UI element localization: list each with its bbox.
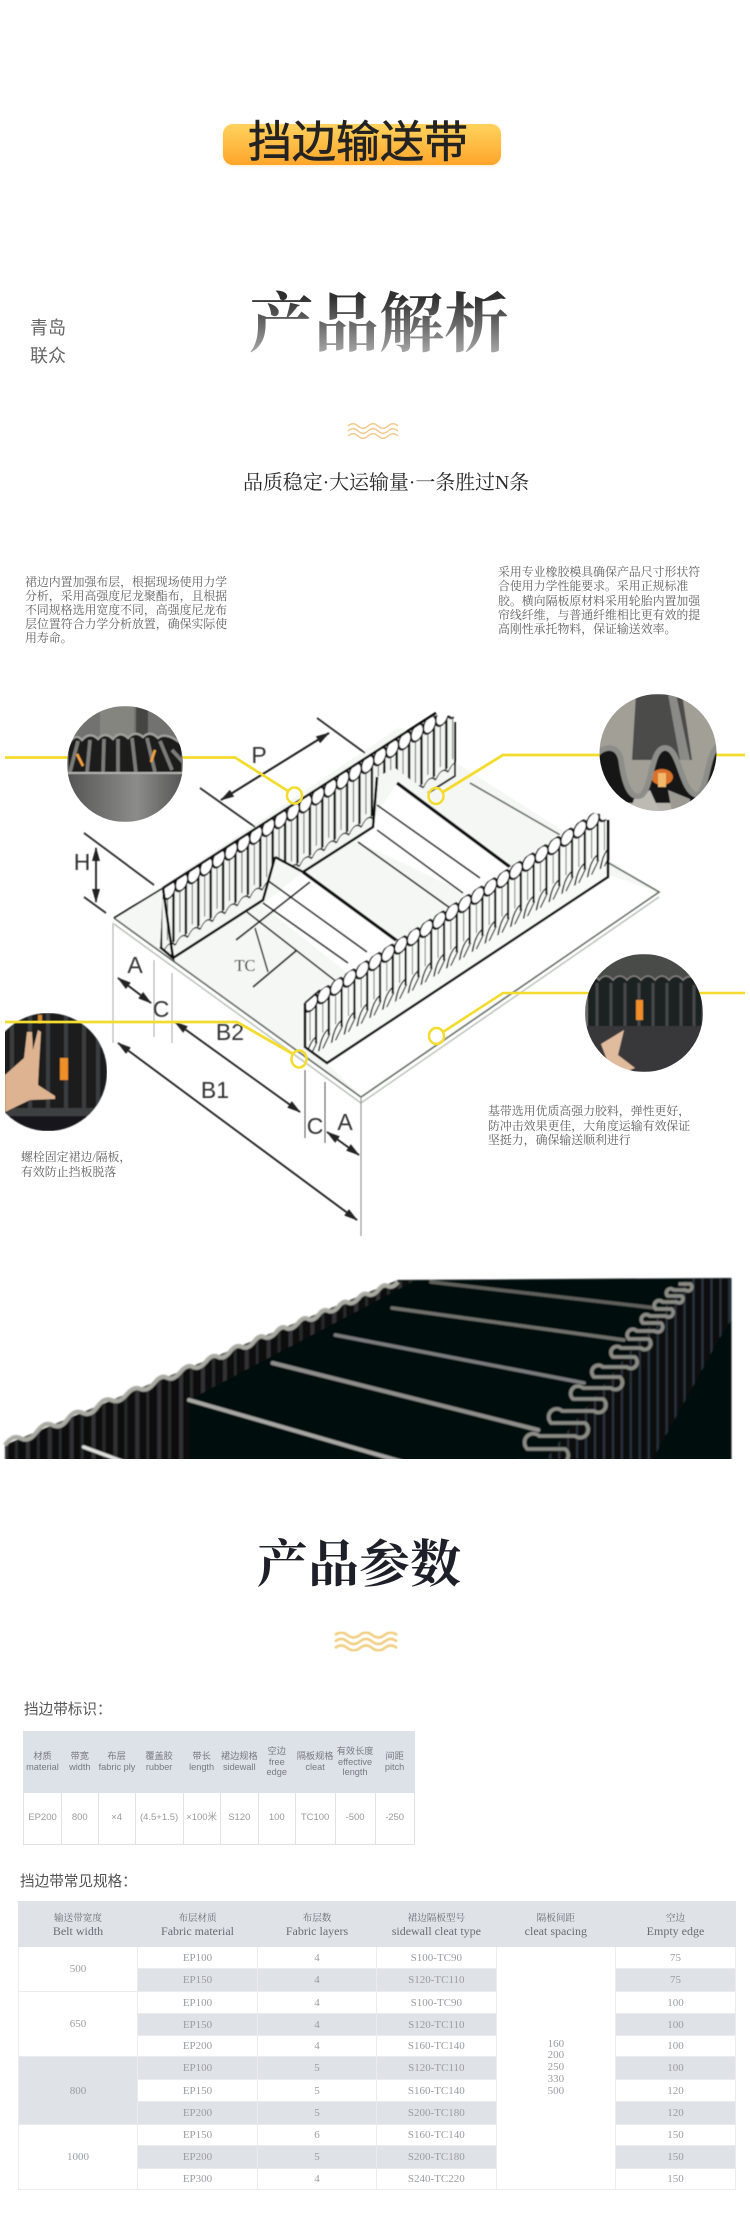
table: common specifications: 5 <box>314 2107 320 2119</box>
table: common specifications: 120 <box>667 2107 684 2119</box>
table: common specifications: EP150 <box>183 2018 212 2030</box>
technical diagram: sidewall belt <box>74 713 659 1236</box>
dimension labels: H <box>74 849 90 875</box>
left sidewall <box>5 1280 416 1470</box>
table: common specifications: 800 <box>70 2084 86 2096</box>
table: belt marking: 间距 <box>385 1751 404 1761</box>
table: common specifications: 100 <box>667 1996 684 2008</box>
table: common specifications: 1000 <box>67 2151 89 2163</box>
table: belt marking: 100 <box>269 1812 285 1823</box>
table: common specifications: 120 <box>667 2084 684 2096</box>
brand label: 青岛 <box>30 318 66 338</box>
table: belt marking: edge <box>267 1767 287 1777</box>
dimension labels <box>74 742 353 1139</box>
front sidewall <box>305 813 608 1063</box>
table: common specifications: 4 <box>314 2173 320 2185</box>
table: belt marking: EP200 <box>28 1812 57 1823</box>
table: belt marking: 裙边规格 <box>221 1751 258 1761</box>
product photo: sidewall belt <box>5 1278 731 1470</box>
table: common specifications: 5 <box>314 2084 320 2096</box>
callout line: lower right <box>429 993 745 1044</box>
table: common specifications: 75 <box>670 1952 681 1964</box>
text block: sidewall reinforcement: 不同规格选用宽度不同，高强度尼龙布 <box>25 603 227 617</box>
callout line: upper right <box>428 755 745 804</box>
dimension labels: A <box>337 1109 353 1135</box>
title banner <box>223 124 501 165</box>
table: belt marking: 带宽 <box>71 1751 89 1761</box>
text block: sidewall reinforcement: 用寿命。 <box>25 631 73 645</box>
text block: sidewall reinforcement <box>25 575 227 645</box>
belt base plate <box>114 727 659 1103</box>
table: belt marking: 带长 <box>192 1751 211 1761</box>
table: belt marking: 布层 <box>107 1751 126 1761</box>
table: common specifications: 330 <box>548 2073 564 2085</box>
text block: bolts <box>21 1150 131 1179</box>
belt floor <box>5 1278 731 1470</box>
dimension labels: C <box>307 1113 323 1139</box>
table: belt marking: length <box>343 1767 368 1777</box>
table: belt marking: free <box>269 1757 285 1767</box>
table: belt marking: 材质 <box>33 1751 52 1761</box>
text block: rubber moulds: 合使用力学性能要求。采用正规标准 <box>498 579 688 593</box>
photo circle: sidewall front view <box>67 706 183 822</box>
table: common specifications: S120-TC110 <box>408 1974 465 1986</box>
table: belt marking: pitch <box>385 1762 404 1772</box>
table: belt marking: 800 <box>72 1812 88 1823</box>
text block: base belt <box>488 1104 690 1147</box>
table: common specifications: EP100 <box>183 1996 212 2008</box>
table: common specifications: 160 <box>548 2038 564 2050</box>
table: common specifications: EP150 <box>183 1974 212 1986</box>
text block: base belt: 坚挺力，确保输送顺利进行 <box>488 1133 631 1147</box>
table: common specifications: 150 <box>667 2151 684 2163</box>
table: common specifications: Fabric material <box>161 1924 234 1938</box>
table: common specifications: cleat spacing <box>525 1924 587 1938</box>
dimension labels: TC <box>234 956 256 975</box>
dimension labels: P <box>251 742 267 768</box>
table: common specifications: 100 <box>667 2062 684 2074</box>
table: common specifications: S160-TC140 <box>408 2129 465 2141</box>
table: common specifications: 150 <box>667 2129 684 2141</box>
text block: rubber moulds: 帘线纤维，与普通纤维相比更有效的提 <box>498 608 700 622</box>
subtitle: 品质稳定·大运输量·一条胜过N条 <box>243 472 529 494</box>
right folded edge <box>515 1284 692 1464</box>
table: common specifications: EP200 <box>183 2151 212 2163</box>
dimension labels: B1 <box>201 1077 229 1103</box>
table: common specifications: EP300 <box>183 2173 212 2185</box>
table: common specifications: 200 <box>548 2049 564 2061</box>
table: belt marking: S120 <box>228 1812 250 1823</box>
heading: product parameters: 产品参数 <box>257 1538 461 1594</box>
table: belt marking: 空边 <box>268 1746 286 1756</box>
table: belt marking: rubber <box>146 1762 172 1772</box>
table: belt marking: 覆盖胶 <box>145 1751 173 1761</box>
icon: gold wave divider <box>335 1632 397 1650</box>
icon: orange wave divider <box>348 424 398 438</box>
table: common specifications: 150 <box>667 2173 684 2185</box>
table: common specifications: 4 <box>314 2018 320 2030</box>
table: common specifications: 空边 <box>666 1913 685 1924</box>
text block: bolts: 有效防止挡板脱落 <box>21 1165 116 1179</box>
table: common specifications: 布层材质 <box>178 1913 217 1924</box>
text block: rubber moulds: 胶。横向隔板原材料采用轮胎内置加强 <box>498 594 700 608</box>
table: common specifications: EP100 <box>183 1952 212 1964</box>
right sidewall <box>537 1279 731 1470</box>
text block: sidewall reinforcement: 分析，采用高强度尼龙聚酯布，且根据 <box>25 589 227 603</box>
table: common specifications: S120-TC110 <box>408 2018 465 2030</box>
table: common specifications: 500 <box>548 2085 564 2097</box>
dimension labels: B2 <box>216 1019 244 1045</box>
table: belt marking: TC100 <box>301 1812 329 1823</box>
table: belt marking: ×100米 <box>186 1812 217 1823</box>
table: common specifications: 75 <box>670 1974 681 1986</box>
text block: rubber moulds: 采用专业橡胶模具确保产品尺寸形状符 <box>498 565 700 579</box>
callout line: upper left <box>5 758 302 804</box>
table: common specifications: S100-TC90 <box>411 1996 462 2008</box>
table: common specifications: 500 <box>70 1963 86 1975</box>
table: belt marking: (4.5+1.5) <box>140 1812 178 1823</box>
table: common specifications: 4 <box>314 1974 320 1986</box>
table: common specifications: S200-TC180 <box>408 2151 465 2163</box>
table: common specifications: S120-TC110 <box>408 2062 465 2074</box>
table: belt marking: cleat <box>305 1762 325 1772</box>
table: common specifications: 5 <box>314 2151 320 2163</box>
table: common specifications: EP200 <box>183 2107 212 2119</box>
table: common specifications: 4 <box>314 2040 320 2052</box>
text block: bolts: 螺栓固定裙边/隔板， <box>21 1150 131 1164</box>
table: common specifications: S160-TC140 <box>408 2084 465 2096</box>
table: common specifications: 6 <box>314 2129 320 2141</box>
table: common specifications: Fabric layers <box>286 1924 348 1938</box>
cleats <box>84 1282 656 1462</box>
photo circle: hand against cleat, lower left <box>0 1013 107 1132</box>
dimension labels: C <box>153 996 169 1022</box>
table: common specifications: S100-TC90 <box>411 1952 462 1964</box>
table: belt marking: length <box>189 1762 214 1772</box>
table: common specifications: 输送带宽度 <box>54 1913 102 1924</box>
table: belt marking: effective <box>338 1757 372 1767</box>
table: belt marking: -500 <box>346 1812 365 1823</box>
back sidewall <box>160 713 455 958</box>
dimension labels: A <box>127 952 143 978</box>
table: common specifications: 5 <box>314 2062 320 2074</box>
table: common specifications: EP150 <box>183 2129 212 2141</box>
table: common specifications: S160-TC140 <box>408 2040 465 2052</box>
table: belt marking: sidewall <box>223 1762 256 1772</box>
left scalloped edge <box>5 1282 398 1445</box>
table: common specifications <box>18 1901 736 2190</box>
callout line: lower left <box>5 1022 306 1068</box>
table title: marking: 挡边带标识： <box>24 1702 112 1718</box>
table: belt marking: material <box>26 1762 59 1772</box>
banner text: 挡边输送带 <box>248 118 468 167</box>
table: common specifications: 100 <box>667 2018 684 2030</box>
text block: sidewall reinforcement: 裙边内置加强布层，根据现场使用力学 <box>25 575 227 589</box>
table: common specifications: EP200 <box>183 2040 212 2052</box>
table: belt marking: -250 <box>385 1812 404 1823</box>
table: common specifications: 250 <box>548 2061 564 2073</box>
table: belt marking <box>23 1731 415 1845</box>
table: common specifications: 隔板间距 <box>537 1913 575 1924</box>
table: common specifications: S240-TC220 <box>408 2173 465 2185</box>
table: common specifications: S200-TC180 <box>408 2107 465 2119</box>
cleat lines <box>236 783 510 1000</box>
table: belt marking: 有效长度 <box>337 1746 373 1756</box>
text block: base belt: 基带选用优质高强力胶料，弹性更好， <box>488 1104 690 1118</box>
table: common specifications: sidewall cleat type <box>392 1924 481 1938</box>
table: common specifications: 4 <box>314 1952 320 1964</box>
table: belt marking: ×4 <box>111 1812 122 1823</box>
dimension lines <box>84 718 365 1220</box>
heading: product analysis: 产品解析 <box>249 289 509 361</box>
table: common specifications: 650 <box>70 2018 86 2030</box>
table: common specifications: EP100 <box>183 2062 212 2074</box>
table: common specifications: 100 <box>667 2040 684 2052</box>
table: common specifications: Belt width <box>53 1924 103 1938</box>
table: belt marking: width <box>69 1762 91 1772</box>
table: belt marking: 隔板规格 <box>297 1751 333 1761</box>
text block: rubber moulds: 高刚性承托物料，保证输送效率。 <box>498 622 676 636</box>
photo circle: sidewall cross section <box>596 694 720 813</box>
table: common specifications: 布层数 <box>303 1913 331 1924</box>
table: belt marking: fabric ply <box>99 1762 135 1772</box>
table: common specifications: EP150 <box>183 2084 212 2096</box>
table: common specifications: Empty edge <box>647 1924 704 1938</box>
text block: rubber moulds <box>498 565 700 636</box>
text block: sidewall reinforcement: 层位置符合力学分析放置，确保实际使 <box>25 617 227 631</box>
table: common specifications: 裙边隔板型号 <box>408 1913 465 1924</box>
brand label <box>30 318 66 366</box>
table: common specifications: 4 <box>314 1996 320 2008</box>
table title: common specs: 挡边带常见规格： <box>20 1874 137 1890</box>
brand label: 联众 <box>30 346 66 366</box>
text block: base belt: 防冲击效果更佳，大角度运输有效保证 <box>488 1119 690 1133</box>
photo circle: hand on belt, lower right <box>585 954 703 1073</box>
